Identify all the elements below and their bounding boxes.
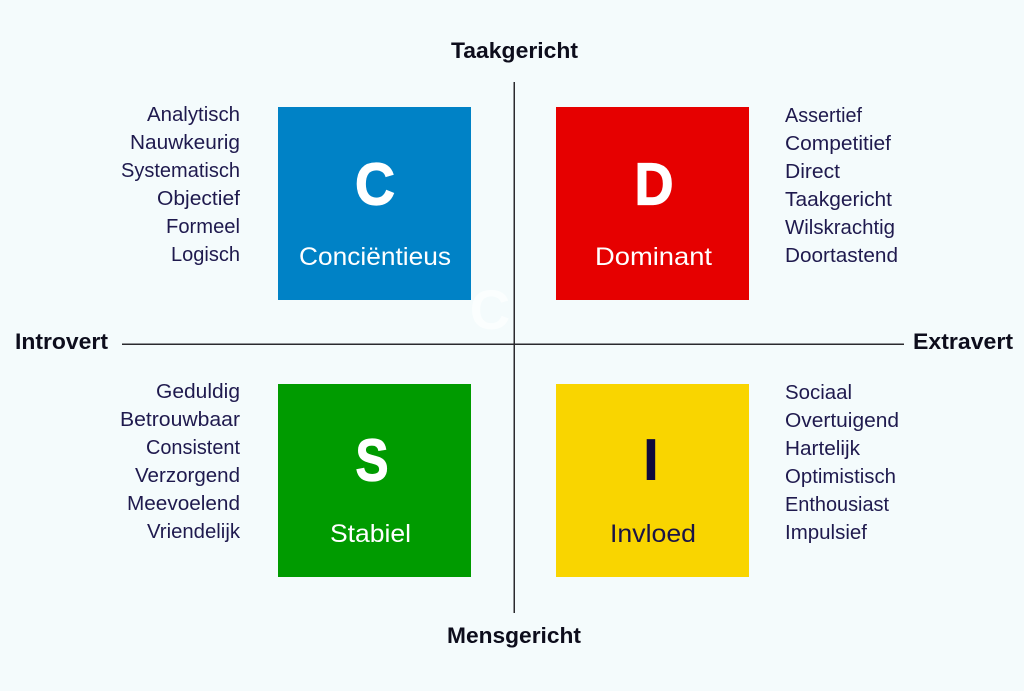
faint ghost letter C: C — [470, 278, 510, 341]
trait list: C: Analytisch — [147, 104, 240, 126]
trait list: D: Taakgericht — [785, 189, 892, 211]
trait list: S — [120, 381, 241, 543]
trait list: I: Overtuigend — [785, 410, 899, 432]
heading: Extravert: Extravert — [913, 329, 1014, 354]
trait list: I: Enthousiast — [785, 494, 889, 516]
panel: S Stabiel — [278, 384, 471, 577]
trait list: S: Consistent — [146, 437, 240, 459]
label Dominant: Dominant — [595, 243, 712, 271]
trait list: C: Objectief — [157, 188, 240, 210]
label Stabiel: Stabiel — [330, 520, 411, 548]
trait list: D: Competitief — [785, 133, 891, 155]
heading: Introvert: Introvert — [15, 329, 109, 354]
trait list: I: Sociaal — [785, 382, 852, 404]
letter D: D — [634, 152, 674, 218]
trait list: S: Vriendelijk — [147, 521, 241, 543]
heading: Taakgericht: Taakgericht — [451, 38, 579, 63]
vertical axis — [514, 82, 515, 613]
trait list: D — [785, 105, 898, 267]
trait list: C: Formeel — [166, 216, 240, 238]
trait list: I: Hartelijk — [785, 438, 861, 460]
trait list: S: Geduldig — [156, 381, 240, 403]
trait list: S: Verzorgend — [135, 465, 240, 487]
trait list: D: Assertief — [785, 105, 862, 127]
letter C: C — [355, 152, 395, 218]
trait list: S: Meevoelend — [127, 493, 240, 515]
trait list: D: Doortastend — [785, 245, 898, 267]
heading: Mensgericht: Mensgericht — [447, 623, 582, 648]
trait list: C: Logisch — [171, 244, 240, 266]
label Invloed: Invloed — [610, 520, 696, 548]
horizontal axis — [122, 344, 904, 345]
trait list: C — [121, 104, 240, 266]
letter I: I — [643, 427, 659, 493]
trait list: C: Systematisch — [121, 160, 240, 182]
letter S: S — [356, 428, 388, 494]
panel: I Invloed — [556, 384, 749, 577]
trait list: D: Wilskrachtig — [785, 217, 895, 239]
panel: D Dominant — [556, 107, 749, 300]
trait list: S: Betrouwbaar — [120, 409, 240, 431]
trait list: I: Optimistisch — [785, 466, 896, 488]
panel: C Conciëntieus — [278, 107, 471, 300]
trait list: I: Impulsief — [785, 522, 867, 544]
trait list: D: Direct — [785, 161, 840, 183]
trait list: C: Nauwkeurig — [130, 132, 240, 154]
trait list: I — [785, 382, 899, 544]
label Conciëntieus: Conciëntieus — [299, 243, 451, 271]
